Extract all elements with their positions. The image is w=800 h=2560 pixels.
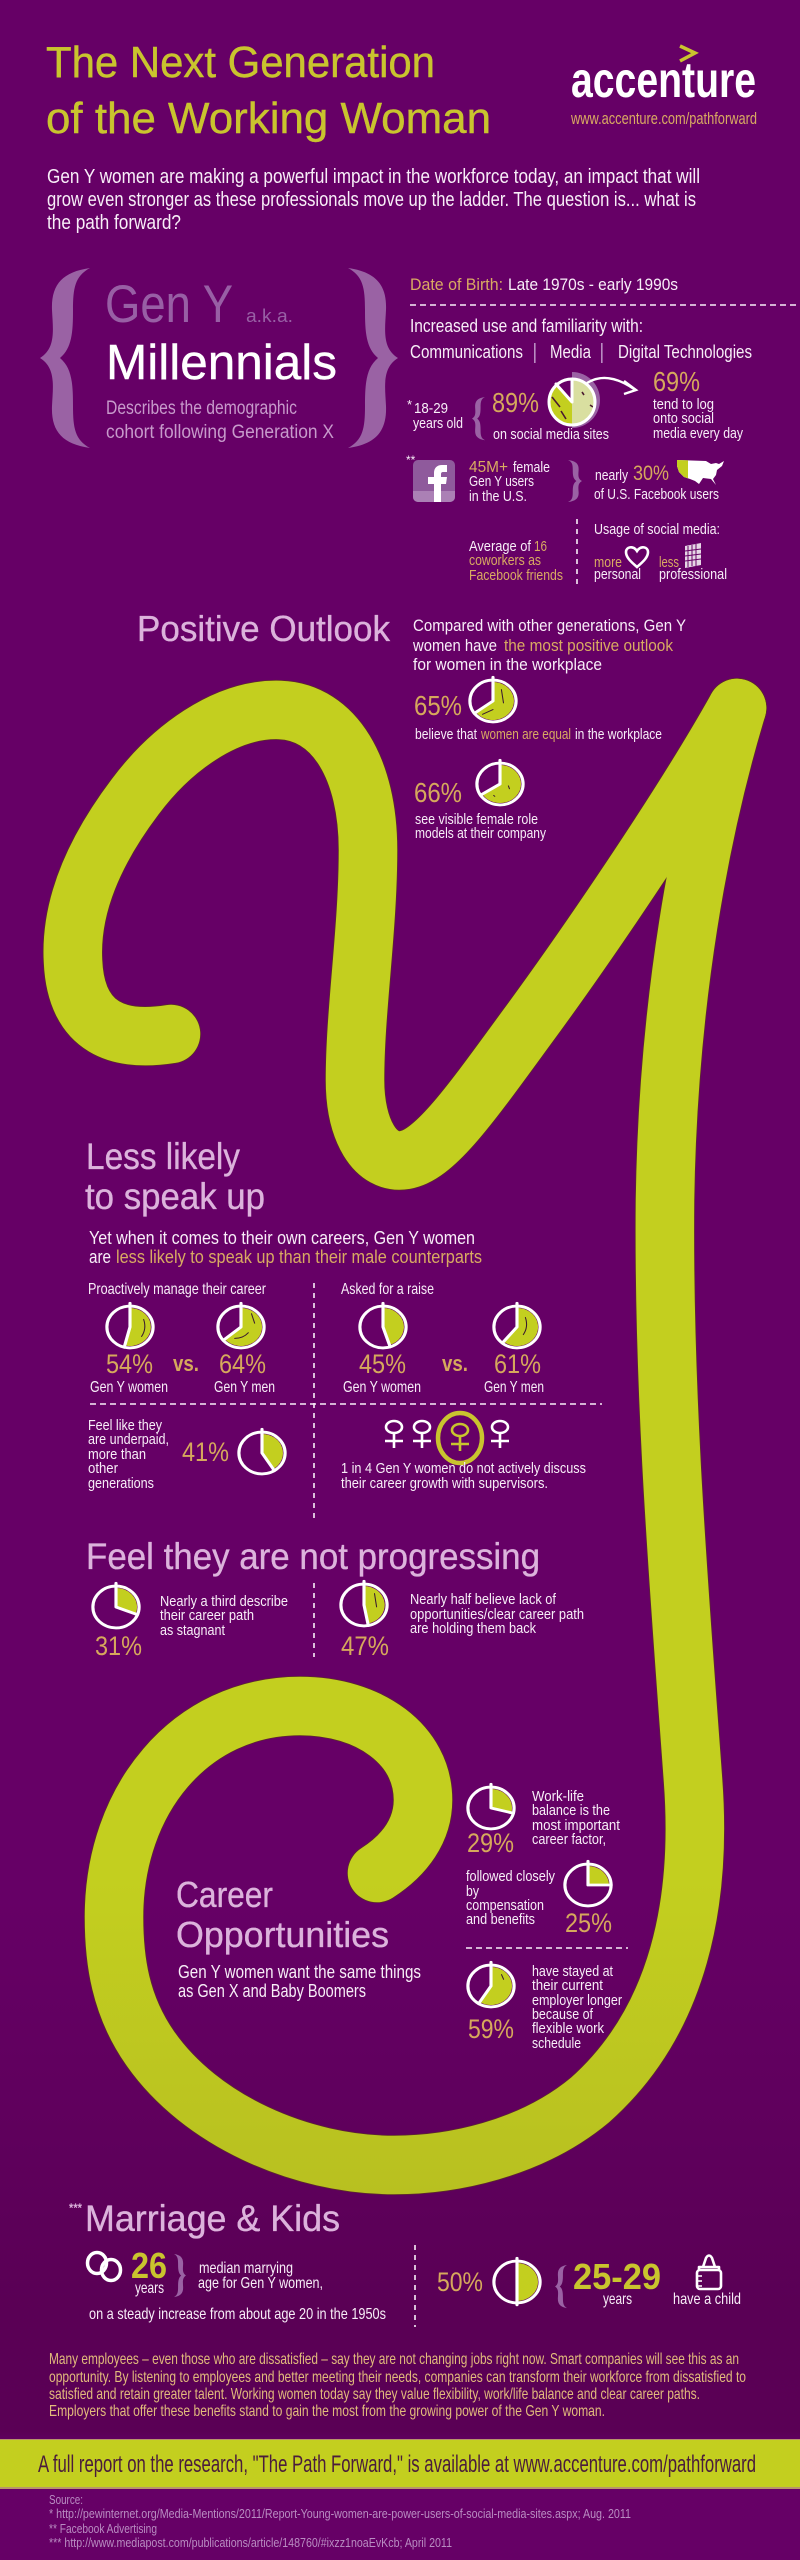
panel: career stagnant: their career path [160,1607,254,1624]
panel: date of birth and technology familiarity: Date of Birth: [410,275,503,294]
text block: sources: *** http://www.mediapost.com/publications/article/148760/#ixzz1noaEvKcb; April 2011 [49,2535,452,2550]
panel: facebook stats: 30% [633,462,669,485]
stat: 65 percent: women are equal [480,726,571,743]
panel: asked for a raise: Gen Y men [484,1379,544,1396]
panel: social media use stats: * [407,397,412,412]
panel: proactively manage career: Proactively manage their career [88,1281,267,1298]
chart: pie 54 [107,1303,153,1348]
panel: proactively manage career: Gen Y women [90,1379,168,1396]
panel: lack of opportunities: opportunities/clear career path [410,1606,584,1623]
icon: accenture chevron [680,46,695,61]
stat: flexible schedule 59 percent: schedule [532,2035,581,2052]
stat: 66 percent: models at their company [415,825,546,842]
icon: heart [626,547,648,567]
stat: compensation 25 percent: compensation [466,1897,544,1914]
panel: proactively manage career: vs. [173,1351,199,1376]
panel: social media use stats: media every day [653,425,743,442]
intro text: the path forward? [47,212,181,234]
text block: sources: * http://pewinternet.org/Media-Mentions/2011/Report-Young-women-are-power-users-of-social-media-sites.aspx; Aug. 2011 [49,2506,631,2521]
icon: baby bottle [697,2256,721,2289]
panel: proactively manage career: 54% [106,1349,153,1379]
panel: asked for a raise: Asked for a raise [341,1281,434,1298]
panel: coworkers and usage of social media: Usage of social media: [594,521,720,538]
panel: date of birth and technology familiarity [410,275,800,363]
panel: lack of opportunities: Nearly half believe lack of [410,1591,557,1608]
panel: career stagnant [93,1583,288,1661]
panel: half have a child: have a child [673,2291,741,2308]
text block: closing paragraph [49,2351,746,2420]
stat: work-life balance 29 percent: Work-life [532,1788,584,1805]
chart: pie 25 [565,1861,611,1906]
accenture logo [570,46,757,128]
stat: 65 percent: 65% [414,690,462,721]
panel: asked for a raise: 45% [359,1349,406,1379]
panel: 1 in 4 women do not discuss career: 1 in 4 Gen Y women do not actively discuss [341,1460,586,1477]
stat: flexible schedule 59 percent: 59% [468,2014,514,2044]
panel: median marrying age [88,2245,386,2323]
text block: career summary: as Gen X and Baby Boomers [178,1981,366,2001]
text block: sources: ** Facebook Advertising [49,2521,157,2536]
panel: underpaid: are underpaid, [88,1431,169,1448]
icon: facebook logo [413,460,455,502]
panel: coworkers and usage of social media: more [594,554,622,571]
title: The Next Generation [46,38,435,87]
panel: positive outlook text: Compared with other generations, Gen Y [413,616,686,635]
heading: career opportunities: Career [176,1874,273,1915]
panel: facebook stats: ** [406,453,416,467]
stat: flexible schedule 59 percent: flexible work [532,2020,604,2037]
panel: facebook stats: of U.S. Facebook users [594,486,719,503]
panel: lack of opportunities [341,1581,584,1661]
text block: speak up summary: Yet when it comes to their own careers, Gen Y women [89,1228,475,1248]
panel: date of birth and technology familiarity: Late 1970s - early 1990s [508,275,678,294]
panel: career stagnant: as stagnant [160,1622,226,1639]
panel: date of birth and technology familiarity: Communications [410,342,523,362]
panel: gen y millennials definition: a.k.a. [246,306,293,326]
icon: right brace [348,268,398,448]
stat: 66 percent: see visible female role [415,811,538,828]
panel: half have a child [437,2256,741,2308]
intro text [47,166,700,234]
stat: flexible schedule 59 percent [468,1962,622,2052]
panel: gen y millennials definition: Millennials [106,336,337,390]
banner: full report [0,2439,800,2489]
stat: 66 percent [414,760,546,842]
panel: facebook stats: in the U.S. [469,488,527,505]
heading: less likely to speak up: to speak up [85,1176,265,1217]
panel: career stagnant: 31% [95,1631,142,1661]
panel: underpaid: generations [88,1475,154,1492]
panel: gen y millennials definition: Describes the demographic [106,398,297,419]
panel: coworkers and usage of social media: 16 [534,538,547,555]
icon: small brace [472,397,485,440]
panel: positive outlook text: for women in the workplace [413,655,602,674]
panel: asked for a raise: 61% [494,1349,541,1379]
icon: small brace [568,460,582,502]
text block: career summary: Gen Y women want the same things [178,1962,421,1982]
panel: facebook stats: 45M+ [469,459,508,476]
panel: 1 in 4 women do not discuss career [341,1413,586,1492]
panel: underpaid: more than [88,1446,146,1463]
panel: asked for a raise: Gen Y women [343,1379,421,1396]
stat: flexible schedule 59 percent: employer longer [532,1992,622,2009]
heading: career opportunities: Opportunities [176,1914,389,1955]
panel: social media use stats: tend to log [653,396,714,413]
panel: half have a child: 50% [437,2267,483,2297]
title [46,38,491,143]
chart: pie 45 [360,1303,406,1348]
panel: half have a child: 25-29 [573,2256,661,2297]
text block: sources: Source: [49,2492,83,2507]
panel: median marrying age: years [135,2280,164,2297]
heading: feel they are not progressing: Feel they are not progressing [86,1536,540,1577]
panel: underpaid: other [88,1460,118,1477]
panel: facebook stats: female [513,459,550,476]
panel: coworkers and usage of social media: professional [659,566,727,583]
text block: speak up summary [89,1228,482,1267]
chart: pie 61 [494,1303,540,1348]
panel: 1 in 4 women do not discuss career: their career growth with supervisors. [341,1475,548,1492]
intro text: Gen Y women are making a powerful impact in the workforce today, an impact that will [47,166,700,188]
panel: date of birth and technology familiarity: Media [550,342,592,362]
panel: underpaid: Feel like they [88,1417,162,1434]
stat: work-life balance 29 percent [467,1784,621,1858]
text block: speak up summary: less likely to speak up than their male counterparts [116,1247,482,1267]
chart: pie 41 [239,1429,285,1474]
panel: date of birth and technology familiarity: Digital Technologies [618,342,752,362]
panel: asked for a raise: vs. [442,1351,468,1376]
panel: social media use stats: 89% [492,387,539,418]
chart: pie 64 [218,1303,264,1348]
heading: less likely to speak up [85,1136,265,1217]
panel: coworkers and usage of social media: Average of [469,538,532,555]
stat: compensation 25 percent: and benefits [466,1911,535,1928]
stat: 66 percent: 66% [414,777,462,808]
icon: small brace [555,2265,567,2308]
heading: positive outlook: Positive Outlook [137,608,391,649]
panel: social media use stats: on social media sites [493,426,609,443]
panel: social media use stats: 18-29 [414,400,448,417]
panel: coworkers and usage of social media: Facebook friends [469,567,563,584]
stat: flexible schedule 59 percent: because of [532,2006,594,2023]
panel: facebook stats: Gen Y users [469,473,534,490]
panel: median marrying age: age for Gen Y women, [198,2275,323,2292]
stat: compensation 25 percent: by [466,1883,479,1900]
heading: less likely to speak up: Less likely [86,1136,240,1177]
panel: lack of opportunities: 47% [341,1631,389,1661]
stat: flexible schedule 59 percent: have stayed at [532,1963,614,1980]
chart: pie 50 [494,2258,540,2305]
giant letter Y ribbon [73,708,737,2165]
stat: 65 percent: in the workplace [575,726,662,743]
panel: coworkers and usage of social media [469,519,727,585]
panel: gen y millennials definition: Gen Y [105,275,233,334]
panel: proactively manage career: 64% [219,1349,266,1379]
chart: pie 65 [470,677,516,722]
text block: speak up summary: are [89,1247,111,1267]
panel: lack of opportunities: are holding them back [410,1620,536,1637]
panel: gen y millennials definition: cohort following Generation X [106,422,334,443]
panel: median marrying age: 26 [131,2245,167,2286]
panel: date of birth and technology familiarity: Increased use and familiarity with: [410,316,643,336]
panel: social media use stats: years old [413,415,463,432]
chart: 89 percent pie with 69 percent slice [549,372,600,428]
panel: social media use stats: onto social [653,410,714,427]
panel: proactively manage career [88,1281,275,1396]
stat: work-life balance 29 percent: career factor, [532,1831,606,1848]
icon: left brace [40,268,90,448]
stat: compensation 25 percent [466,1861,612,1938]
stat: compensation 25 percent: 25% [565,1908,612,1938]
panel: positive outlook text: women have [412,636,497,655]
panel: positive outlook text [412,616,686,674]
heading: marriage and kids: Marriage & Kids [85,2198,340,2239]
icon: US map [677,460,724,485]
panel: facebook stats [406,456,724,502]
heading: marriage and kids: *** [69,2201,82,2215]
panel: coworkers and usage of social media: coworkers as [469,552,541,569]
chart: pie 29 [468,1784,514,1829]
title: of the Working Woman [46,94,491,143]
stat: compensation 25 percent: followed closely [466,1868,555,1885]
panel: social media use stats: 69% [653,366,700,397]
stat: work-life balance 29 percent: most important [532,1817,621,1834]
panel: half have a child: years [603,2291,632,2308]
stat: flexible schedule 59 percent: their current [532,1977,604,1994]
icon: female symbols [385,1413,509,1463]
stat: 65 percent [414,677,662,743]
panel: median marrying age: on a steady increase from about age 20 in the 1950s [89,2306,386,2323]
panel: coworkers and usage of social media: less [659,554,679,571]
chart: pie 59 [468,1962,514,2007]
icon: wedding rings [88,2252,120,2280]
panel: asked for a raise [341,1281,544,1396]
panel: median marrying age: median marrying [199,2260,293,2277]
stat: work-life balance 29 percent: 29% [467,1828,514,1858]
panel: proactively manage career: Gen Y men [214,1379,275,1396]
arrow [587,378,636,394]
panel: facebook stats: nearly [595,467,628,484]
chart: pie 31 [93,1583,139,1628]
panel: underpaid [88,1417,285,1492]
text block: closing paragraph: Employers that offer these benefits stand to gain the most from the growing power of the Gen Y woman. [49,2403,605,2420]
icon: office building [685,543,701,568]
stat: 65 percent: believe that [415,726,478,743]
panel: positive outlook text: the most positive outlook [504,636,673,655]
panel: coworkers and usage of social media: personal [594,566,641,583]
text block: career summary [178,1962,421,2001]
panel: career stagnant: Nearly a third describe [160,1593,288,1610]
chart: pie 66 [477,760,523,805]
heading: career opportunities [176,1874,389,1955]
chart: pie 47 [341,1581,387,1626]
panel: social media use stats [407,366,743,443]
panel: underpaid: 41% [182,1437,229,1467]
icon: small brace [174,2254,186,2297]
stat: work-life balance 29 percent: balance is the [532,1802,610,1819]
text block: sources [49,2492,631,2550]
panel: gen y millennials definition [40,268,398,448]
